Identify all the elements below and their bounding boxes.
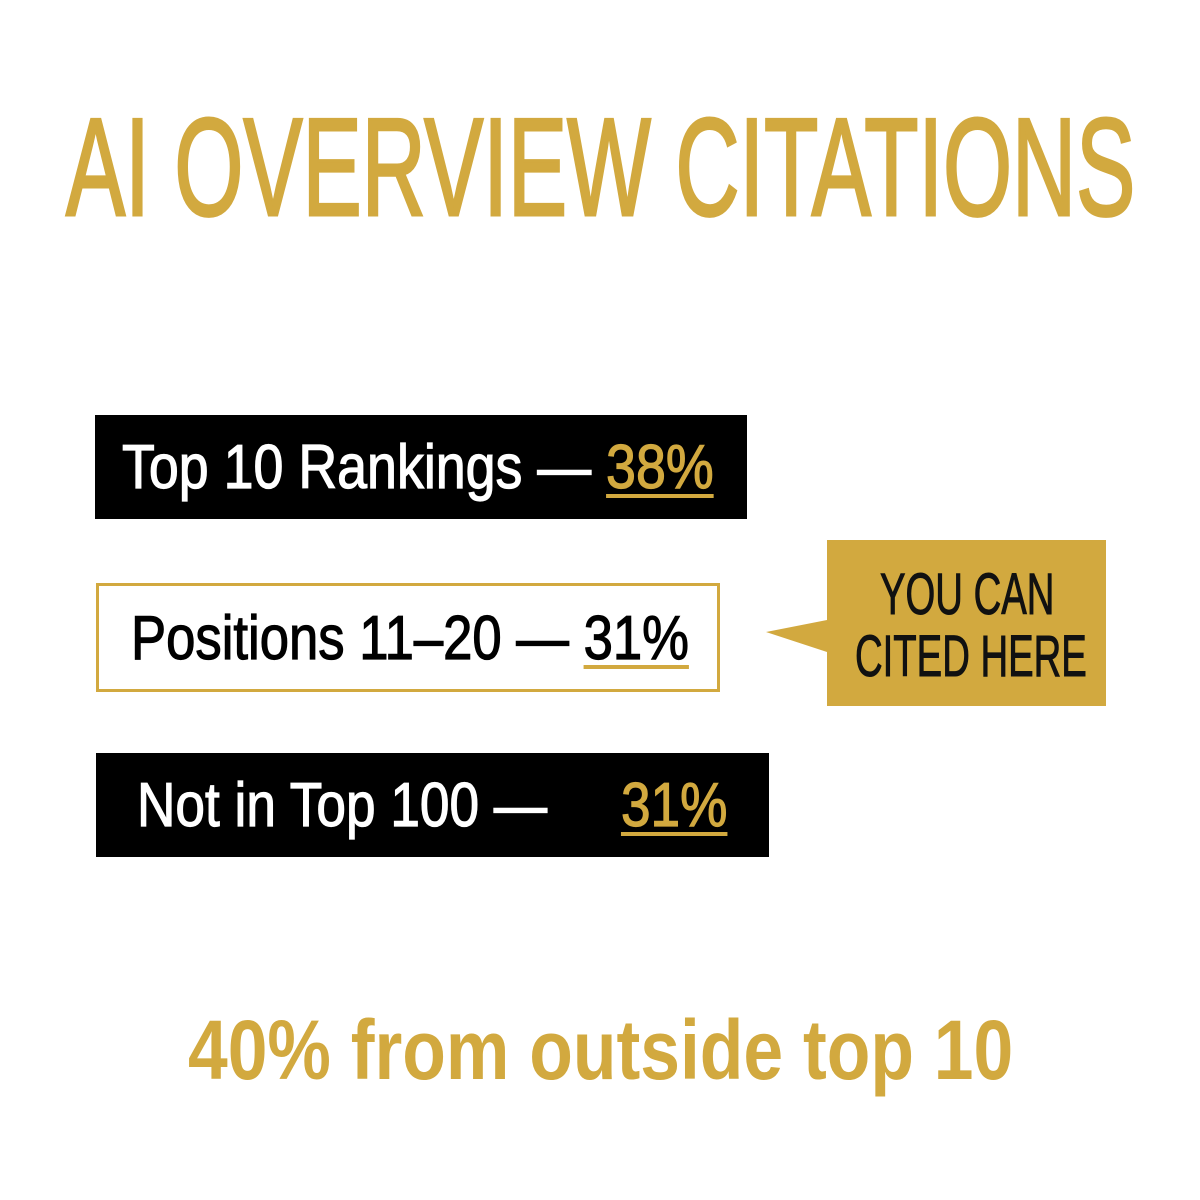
footer statement: 40% from outside top 10: [188, 1003, 1013, 1097]
row: top 10 rankings: [95, 415, 747, 519]
row: positions 11-20: Positions 11–20 — 31%: [131, 604, 689, 673]
callout: you can cited here: [766, 540, 1106, 706]
callout: you can cited here: CITED HERE: [855, 624, 1087, 689]
title: AI OVERVIEW CITATIONS: [66, 90, 1135, 245]
row: top 10 rankings: Top 10 Rankings — 38%: [122, 433, 714, 502]
row: not in top 100: Not in Top 100 — 31%: [137, 771, 727, 840]
callout: you can cited here: YOU CAN: [880, 562, 1054, 627]
row: not in top 100: [96, 753, 769, 857]
row: positions 11-20: [96, 583, 720, 692]
